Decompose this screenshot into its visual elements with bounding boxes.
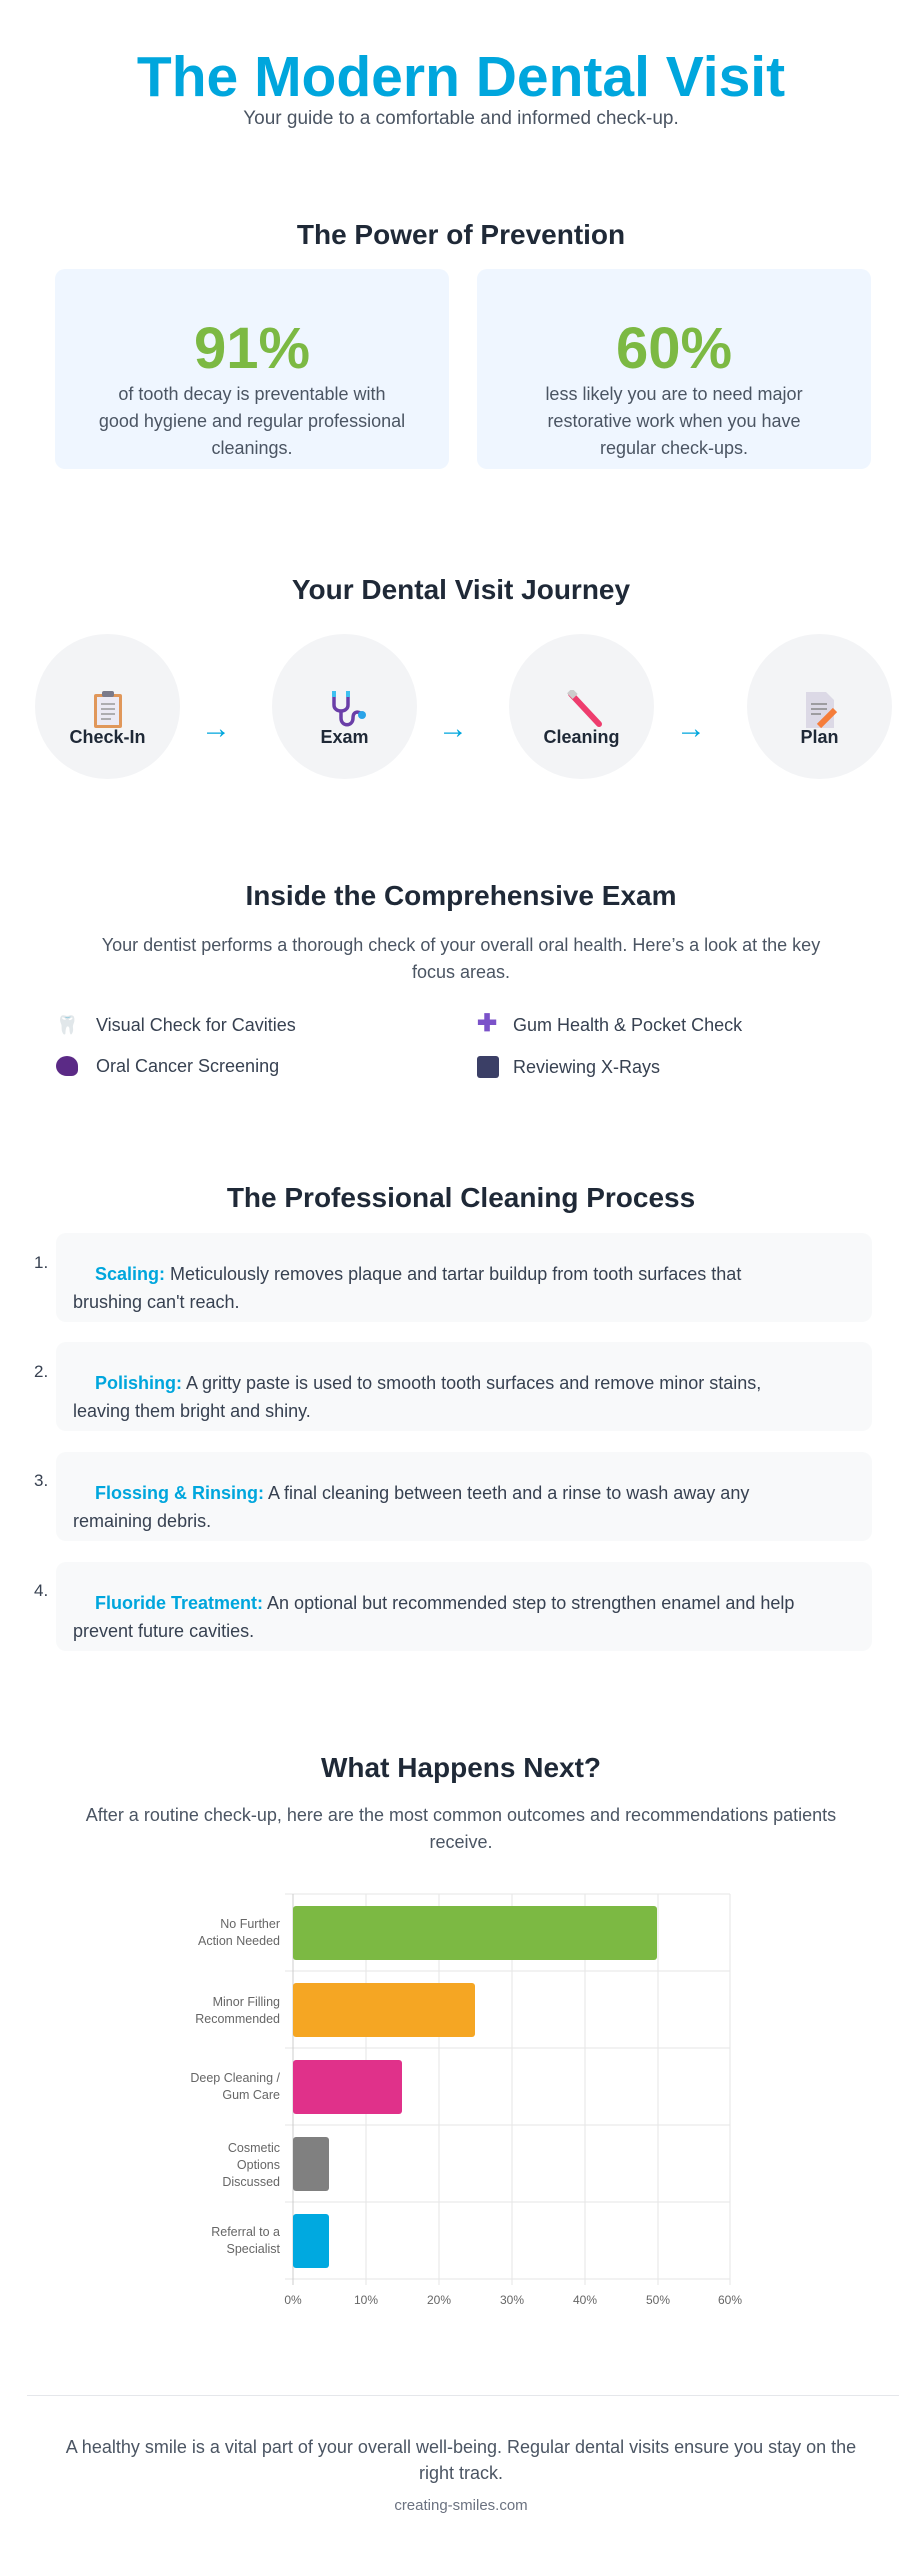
bar chart: 50% bbox=[646, 2293, 670, 2307]
item: gum: Gum Health & Pocket Check bbox=[513, 1015, 742, 1035]
bar: minor filling 25% bbox=[293, 1983, 475, 2037]
bar chart: 20% bbox=[427, 2293, 451, 2307]
step 2: 2. bbox=[34, 1362, 48, 1381]
step: check-in bbox=[35, 634, 180, 779]
card: 91%: of tooth decay is preventable with bbox=[118, 384, 386, 404]
bar chart: Cosmetic bbox=[228, 2141, 280, 2155]
card: 91% bbox=[55, 269, 449, 469]
cleaning steps: Fluoride Treatment: An optional but recommended step to strengthen enamel and help bbox=[95, 1593, 794, 1613]
bar chart bbox=[190, 1894, 742, 2307]
bar: no further action 50% bbox=[293, 1906, 657, 1960]
bar chart: 30% bbox=[500, 2293, 524, 2307]
card: 91%: 91% bbox=[194, 316, 310, 381]
cleaning steps: Scaling: Meticulously removes plaque and tartar buildup from tooth surfaces that bbox=[95, 1264, 741, 1284]
step: exam bbox=[272, 634, 417, 779]
heading: cleaning: The Professional Cleaning Process bbox=[227, 1182, 695, 1213]
card: 60% bbox=[477, 269, 871, 469]
card: 60%: less likely you are to need major bbox=[545, 384, 803, 404]
bar chart: Deep Cleaning / bbox=[190, 2071, 280, 2085]
cleaning steps: leaving them bright and shiny. bbox=[73, 1401, 311, 1421]
bar chart: Options bbox=[237, 2158, 280, 2172]
card: 60%: 60% bbox=[616, 316, 732, 381]
footer text bbox=[66, 2437, 856, 2483]
step: check-in: Check-In bbox=[69, 727, 146, 747]
step: plan bbox=[747, 634, 892, 779]
cleaning steps: prevent future cavities. bbox=[73, 1621, 254, 1641]
cleaning steps: brushing can't reach. bbox=[73, 1292, 240, 1312]
footer text: A healthy smile is a vital part of your overall well-being. Regular dental visits ensure you stay on the bbox=[66, 2437, 856, 2457]
bar: referral 5% bbox=[293, 2214, 329, 2268]
step: exam: Exam bbox=[320, 727, 369, 747]
axis labels: Action Needed bbox=[198, 1934, 280, 1948]
heading: next: What Happens Next? bbox=[321, 1752, 601, 1783]
bar: cosmetic 5% bbox=[293, 2137, 329, 2191]
card: 91%: cleanings. bbox=[211, 438, 293, 458]
item: gum: ✚ bbox=[477, 1010, 497, 1037]
bar chart: 10% bbox=[354, 2293, 378, 2307]
arrow: → bbox=[201, 712, 231, 745]
axis labels bbox=[198, 1917, 280, 1948]
card: 60%: regular check-ups. bbox=[600, 438, 748, 458]
cleaning steps: remaining debris. bbox=[73, 1511, 211, 1531]
exam intro: Your dentist performs a thorough check of your overall oral health. Here’s a look at the key bbox=[102, 935, 820, 955]
step: cleaning bbox=[509, 634, 654, 779]
bar chart: Recommended bbox=[195, 2012, 280, 2026]
cleaning steps: Flossing & Rinsing: A final cleaning between teeth and a rinse to wash away any bbox=[95, 1483, 749, 1503]
bar chart: 60% bbox=[718, 2293, 742, 2307]
item: oral cancer: Oral Cancer Screening bbox=[96, 1056, 279, 1076]
bar chart: Minor Filling bbox=[213, 1995, 280, 2009]
footer url: creating-smiles.com bbox=[394, 2497, 528, 2514]
cleaning steps bbox=[34, 1253, 794, 1641]
item: x-rays: Reviewing X-Rays bbox=[513, 1057, 660, 1077]
title: The Modern Dental Visit bbox=[137, 45, 785, 109]
card: 91%: good hygiene and regular professional bbox=[99, 411, 405, 431]
bar chart: Discussed bbox=[222, 2175, 280, 2189]
bar chart: 40% bbox=[573, 2293, 597, 2307]
cleaning steps: Polishing: A gritty paste is used to smooth tooth surfaces and remove minor stains, bbox=[95, 1373, 761, 1393]
arrow: → bbox=[438, 712, 468, 745]
exam focus list bbox=[56, 1010, 742, 1078]
card: 60%: restorative work when you have bbox=[547, 411, 801, 431]
step 1: 1. bbox=[34, 1253, 48, 1272]
item: cavities: 🦷 bbox=[56, 1015, 78, 1035]
arrow: → bbox=[676, 712, 706, 745]
next intro bbox=[86, 1805, 836, 1852]
next intro: receive. bbox=[429, 1832, 493, 1852]
heading: journey: Your Dental Visit Journey bbox=[292, 574, 630, 605]
step 4: 4. bbox=[34, 1581, 48, 1600]
step: plan: Plan bbox=[800, 727, 838, 747]
next intro: After a routine check-up, here are the most common outcomes and recommendations patients bbox=[86, 1805, 836, 1825]
footer text: right track. bbox=[419, 2463, 503, 2483]
item: cavities: Visual Check for Cavities bbox=[96, 1015, 296, 1035]
bar chart: 0% bbox=[284, 2293, 302, 2307]
bar: deep cleaning 15% bbox=[293, 2060, 402, 2114]
bar chart: Referral to a bbox=[211, 2225, 280, 2239]
bar chart: Specialist bbox=[226, 2242, 280, 2256]
step: cleaning: Cleaning bbox=[543, 727, 620, 747]
step 3: 3. bbox=[34, 1471, 48, 1490]
exam intro: focus areas. bbox=[412, 962, 510, 982]
item: gum bbox=[477, 1010, 742, 1037]
subtitle: Your guide to a comfortable and informed check-up. bbox=[243, 108, 679, 129]
bar chart: Gum Care bbox=[222, 2088, 280, 2102]
heading: exam: Inside the Comprehensive Exam bbox=[245, 880, 677, 911]
exam intro bbox=[102, 935, 820, 982]
axis labels: No Further bbox=[220, 1917, 280, 1931]
heading: prevention: The Power of Prevention bbox=[297, 219, 625, 250]
